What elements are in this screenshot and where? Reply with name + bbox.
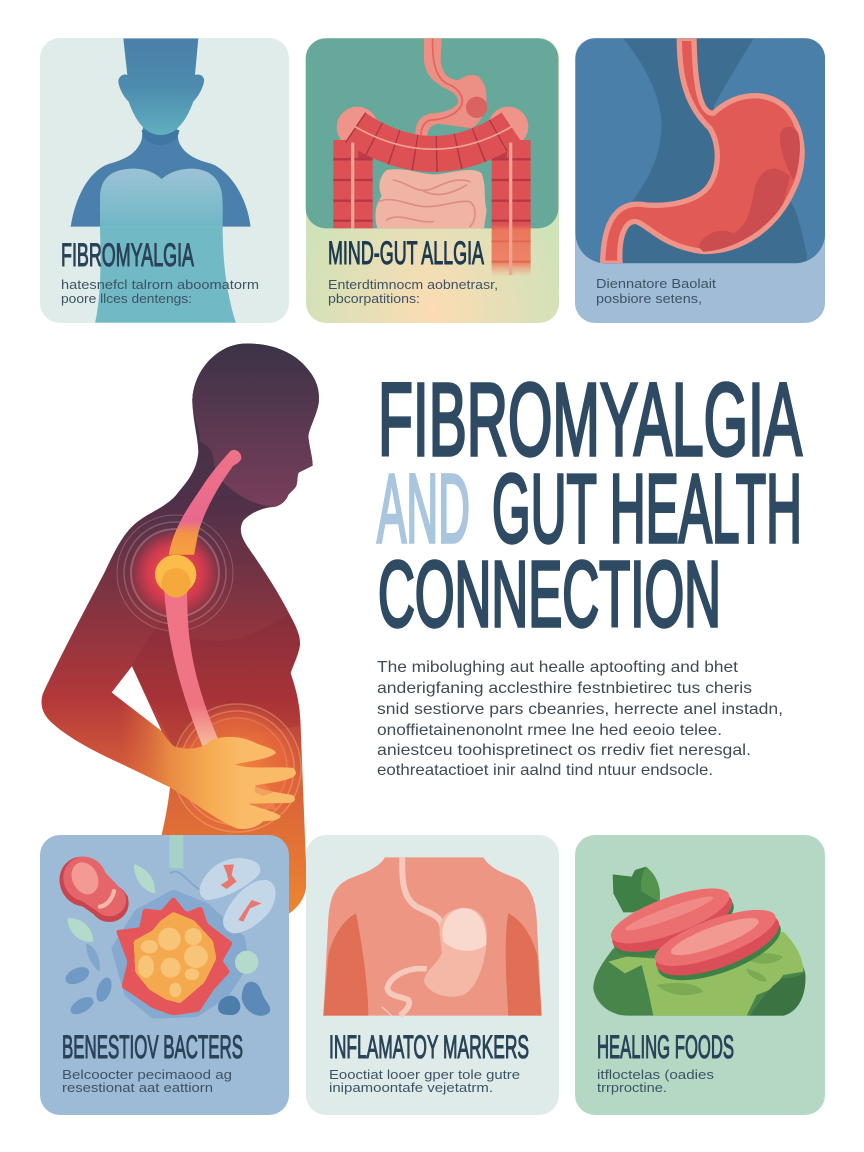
hand on abdomen xyxy=(97,693,296,829)
panel background xyxy=(575,38,825,323)
icon: upper body figure xyxy=(71,38,251,323)
digestive tract line xyxy=(155,450,241,752)
description: itfloctelas (oadies xyxy=(597,1067,715,1082)
description: pbcorpatitions: xyxy=(328,291,420,306)
icon: torso with stomach xyxy=(323,857,542,1016)
title: AND xyxy=(377,454,470,563)
description: Diennatore Baolait xyxy=(596,276,716,291)
intro paragraph: anderigfaning acclesthire festnbietirec tus cheris xyxy=(377,680,752,697)
icon: food xyxy=(593,867,805,1016)
panel: stomach xyxy=(575,38,825,323)
description: Eooctiat looer gper tole gutre xyxy=(329,1067,520,1082)
description: trrproctine. xyxy=(597,1080,667,1095)
icon: digestive system xyxy=(333,38,531,277)
heading: FIBROMYALGIA xyxy=(61,237,194,273)
panel background xyxy=(575,835,825,1115)
central figure: person holding stomach xyxy=(42,344,319,915)
intro paragraph: onoffietainenonolnt rmee lne hed eeoio telee. xyxy=(377,722,722,739)
description: poore llces dentengs: xyxy=(61,291,192,306)
description xyxy=(61,277,259,306)
title xyxy=(377,362,802,646)
heading: MIND-GUT ALLGIA xyxy=(328,235,484,271)
panel: healing foods xyxy=(575,835,825,1115)
description: inipamoontafe vejetatrm. xyxy=(329,1080,493,1095)
intro paragraph: snid sestiorve pars cbeanries, herrecte anel instadn, xyxy=(377,701,783,718)
icon: stomach xyxy=(576,38,825,263)
description xyxy=(329,1067,520,1095)
description xyxy=(596,276,716,306)
panel background xyxy=(40,835,289,1115)
heading: INFLAMATOY MARKERS xyxy=(329,1029,529,1065)
pain glow: chest xyxy=(117,515,233,631)
teal upper area xyxy=(306,38,558,228)
intro paragraph: aniestceu toohispretinect os rrediv fiet neresgal. xyxy=(377,742,751,759)
pain glow: abdomen xyxy=(172,703,302,833)
heading: BENESTIOV BACTERS xyxy=(62,1029,243,1065)
panel: fibromyalgia xyxy=(40,38,289,323)
description: Belcoocter pecimaood ag xyxy=(62,1067,232,1082)
description xyxy=(328,277,498,306)
panel background xyxy=(306,38,559,323)
icon: bacteria illustration xyxy=(50,835,276,1018)
intro paragraph: The mibolughing aut healle aptoofting and bhet xyxy=(377,659,739,676)
description: resestionat aat eattiorn xyxy=(62,1080,213,1095)
intro paragraph xyxy=(377,659,783,779)
description: hatesnefcl talrorn aboomatorm xyxy=(61,277,259,292)
panel background xyxy=(306,835,559,1115)
intro paragraph: eothreatactioet inir aalnd tind ntuur endsocle. xyxy=(377,762,713,779)
description: Enterdtimnocm aobnetrasr, xyxy=(328,277,498,292)
heading: HEALING FOODS xyxy=(597,1029,734,1065)
description xyxy=(597,1067,715,1095)
panel background xyxy=(40,38,289,323)
panel: beneficial bacteria xyxy=(40,835,289,1115)
panel: mind-gut xyxy=(306,38,559,323)
description: posbiore setens, xyxy=(596,291,702,306)
panel: inflammatory markers xyxy=(306,835,559,1115)
description xyxy=(62,1067,232,1095)
figure silhouette xyxy=(42,344,319,915)
